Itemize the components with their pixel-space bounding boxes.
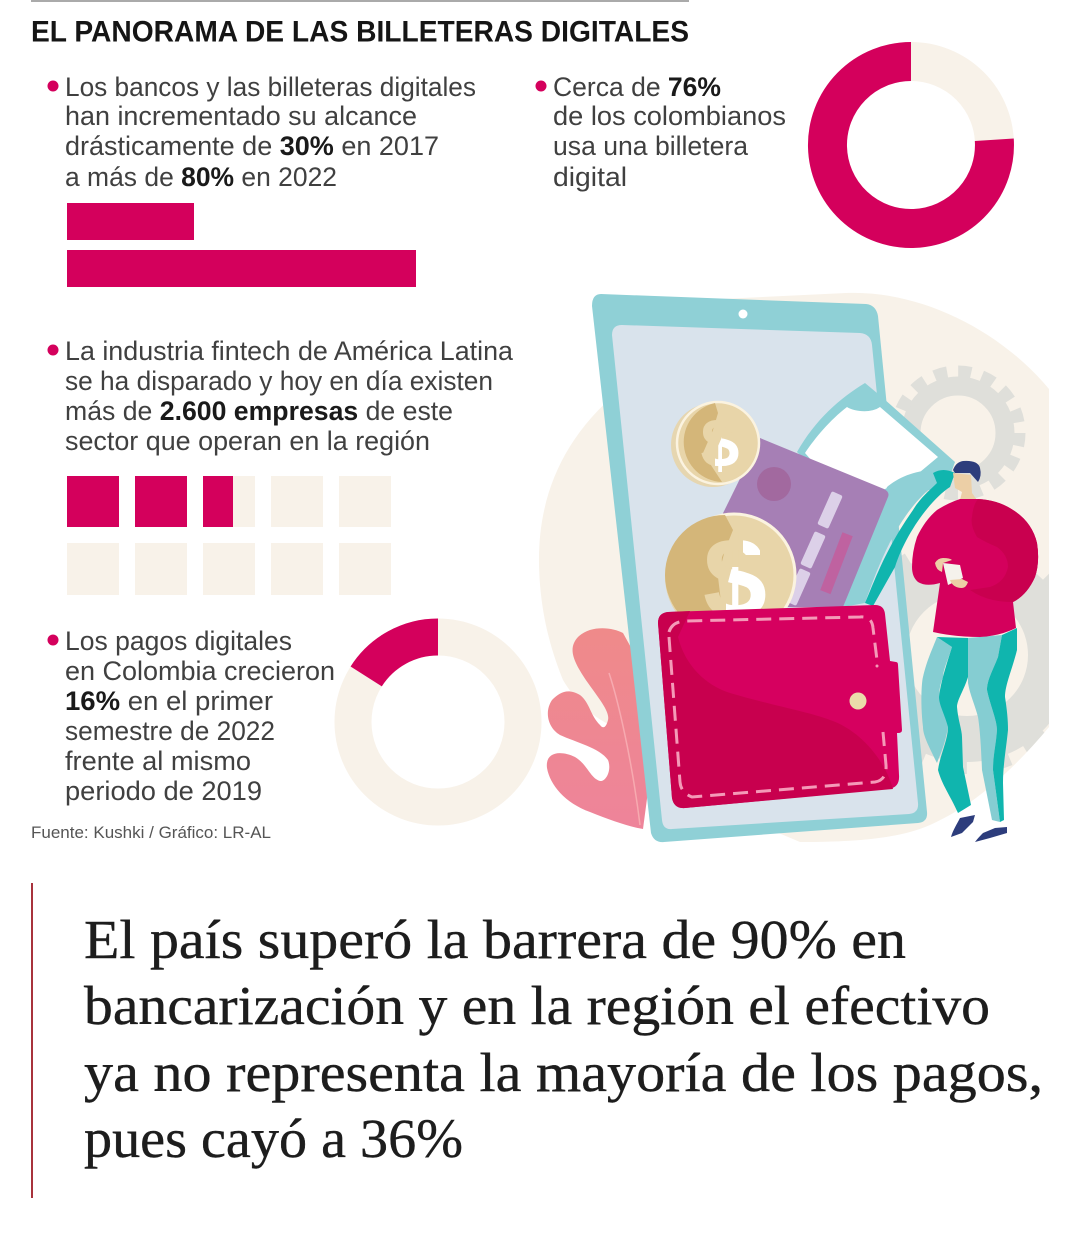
text block: digital payments: en Colombia crecieron	[65, 656, 335, 686]
text block: digital payments: frente al mismo	[65, 746, 251, 776]
text block: fintech industry	[65, 336, 514, 456]
icon: large coin: $	[703, 515, 767, 643]
bullet	[48, 634, 58, 646]
icon: small coin: $	[701, 404, 739, 482]
shoes	[951, 815, 1007, 842]
text block: bank reach	[65, 72, 476, 192]
hair	[953, 461, 981, 482]
panel: digital payments	[48, 626, 523, 807]
quote text: ya no representa la mayoría de los pagos,	[84, 1042, 1043, 1103]
icon: banknote	[797, 383, 955, 607]
text block: digital payments	[65, 626, 335, 806]
quote text: bancarización y en la región el efectivo	[84, 975, 990, 1036]
text block: wallet use	[553, 72, 786, 192]
quote text: El país superó la barrera de 90% en	[84, 909, 906, 970]
donut chart: 76%	[827, 61, 994, 228]
text block: fintech industry: sector que operan en la región	[65, 426, 430, 456]
text block: wallet use: digital	[553, 162, 627, 192]
text block: fintech industry: más de 2.600 empresas de este	[65, 396, 453, 426]
title: EL PANORAMA DE LAS BILLETERAS DIGITALES	[31, 16, 689, 48]
bar chart: 30% vs 80%	[67, 203, 416, 287]
text block: fintech industry: La industria fintech de América Latina	[65, 336, 514, 366]
text block: wallet use: de los colombianos	[553, 101, 786, 131]
icon: leaf	[547, 628, 660, 829]
bullet	[48, 80, 58, 92]
text block: bank reach: Los bancos y las billeteras digitales	[65, 72, 476, 102]
text block: fintech industry: se ha disparado y hoy en día existen	[65, 366, 493, 396]
icon: large coin: $	[703, 515, 767, 643]
background blob	[539, 293, 1049, 842]
bullet	[48, 344, 58, 356]
quote text: pues cayó a 36%	[84, 1108, 463, 1169]
sweater	[912, 499, 1038, 637]
text block: digital payments: semestre de 2022	[65, 716, 275, 746]
text block: bank reach: drásticamente de 30% en 2017	[65, 131, 439, 161]
icon: lower gear	[902, 554, 1049, 774]
text block: bank reach: a más de 80% en 2022	[65, 162, 337, 192]
bullet	[536, 80, 546, 92]
text block: wallet use: usa una billetera	[553, 131, 749, 161]
icon: upper gear	[897, 372, 1019, 494]
legs	[921, 628, 1017, 822]
panel: fintech industry	[48, 336, 514, 595]
illustration: phone, wallet and person	[539, 293, 1079, 842]
icon: credit card	[700, 438, 888, 607]
text block: digital payments: periodo de 2019	[65, 776, 262, 806]
icon: person	[912, 461, 1038, 842]
panel: bank reach	[48, 72, 476, 287]
pictogram: squares	[67, 476, 391, 595]
icon: phone	[592, 294, 927, 842]
text block: wallet use: Cerca de 76%	[553, 72, 721, 102]
icon: small coin	[671, 402, 759, 487]
icon: small coin: $	[701, 404, 739, 482]
neck and head	[953, 473, 977, 500]
panel: 76% wallet use	[536, 61, 994, 228]
text block: bank reach: han incrementado su alcance	[65, 101, 417, 131]
icon: wallet	[658, 605, 902, 808]
phone in hand	[943, 563, 963, 585]
donut chart: 16%	[353, 637, 523, 807]
icon: large coin	[665, 512, 796, 612]
text block: digital payments: 16% en el primer	[65, 686, 273, 716]
text block: digital payments: Los pagos digitales	[65, 626, 292, 656]
source note: Fuente: Kushki / Gráfico: LR-AL	[31, 823, 271, 842]
pull quote	[31, 883, 1043, 1198]
quote text	[84, 909, 1043, 1169]
